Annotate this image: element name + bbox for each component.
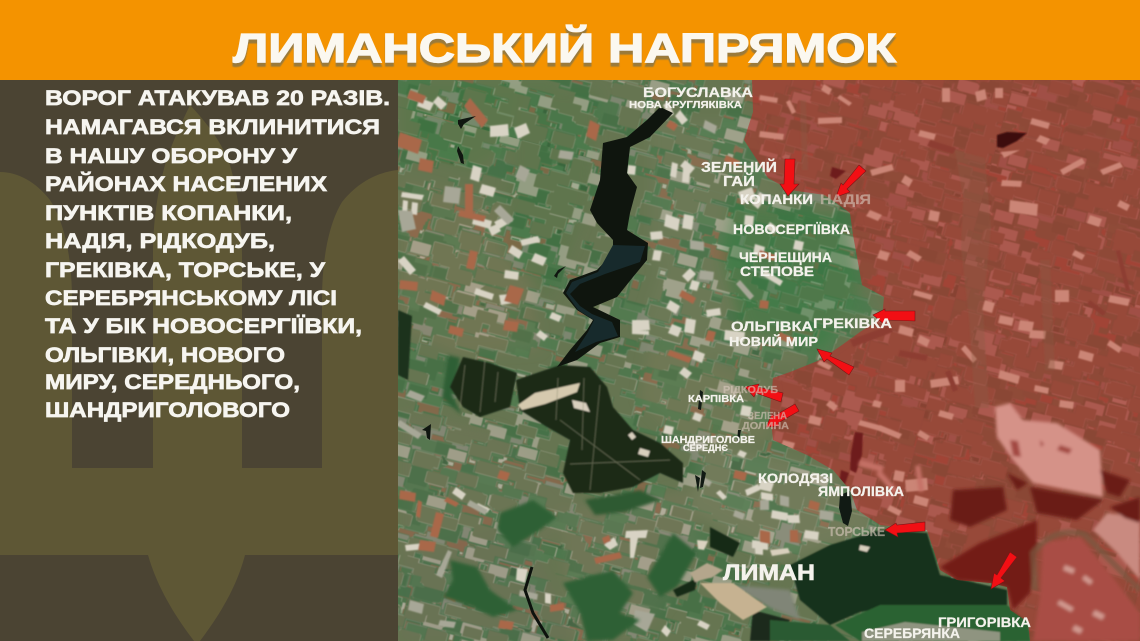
text: attack summary: СЕРЕБРЯНСЬКОМУ ЛІСІ <box>45 286 337 310</box>
text: attack summary: МИРУ, СЕРЕДНЬОГО, <box>45 370 300 394</box>
labels: settlements: РІДКОДУБ <box>723 384 778 396</box>
arrow: Kopanky <box>780 159 799 196</box>
map: satellite view of the Lyman direction <box>396 80 1140 641</box>
arrows: attack directions <box>745 159 1017 589</box>
arrow: Hrekivka <box>873 309 915 325</box>
labels: settlements: НОВИЙ МИР <box>729 334 818 349</box>
arrow: Novyi Myr <box>817 349 854 375</box>
labels: settlements: СЕРЕБРЯНКА <box>864 625 960 641</box>
occupied territory: red overlay <box>740 80 1140 641</box>
text: attack summary: РАЙОНАХ НАСЕЛЕНИХ <box>45 171 328 196</box>
labels: settlements: ШАНДРИГОЛОВЕ <box>661 434 755 446</box>
labels: settlements: КОЛОДЯЗІ <box>758 470 833 486</box>
labels: settlements: НАДІЯ <box>820 191 871 207</box>
labels: settlements: КОПАНКИ <box>740 191 813 207</box>
labels: settlements: ТОРСЬКЕ <box>828 524 885 539</box>
text: attack summary: ПУНКТІВ КОПАНКИ, <box>45 201 292 225</box>
red zone: field patches <box>759 84 1130 525</box>
title: ЛИМАНСЬКИЙ НАПРЯМОК <box>233 25 897 71</box>
text: attack summary: ВОРОГ АТАКУВАВ 20 РАЗІВ. <box>45 86 390 110</box>
terrain: forests <box>398 310 1030 641</box>
labels: settlements: БОГУСЛАВКА <box>643 84 753 100</box>
labels: settlements <box>629 84 1031 641</box>
terrain: green fields near the front <box>725 205 875 350</box>
labels: settlements: ГРИГОРІВКА <box>938 614 1031 630</box>
labels: settlements: ЛИМАН <box>723 560 815 585</box>
arrow: Zelena Dolyna <box>766 404 799 427</box>
labels: settlements: ЗЕЛЕНИЙ <box>701 158 777 176</box>
labels: settlements: НОВА КРУГЛЯКІВКА <box>629 99 742 111</box>
text: attack summary: НАМАГАВСЯ ВКЛИНИТИСЯ <box>45 115 380 139</box>
arrow: Nadiia <box>836 165 866 197</box>
labels: settlements: КАРПІВКА <box>688 393 744 405</box>
text: attack summary: В НАШУ ОБОРОНУ У <box>45 144 298 168</box>
text: attack summary: ТА У БІК НОВОСЕРГІЇВКИ, <box>45 314 362 338</box>
arrow: Ridkodub <box>745 384 783 402</box>
emblem: trident watermark <box>0 105 398 641</box>
text: attack summary: ОЛЬГІВКИ, НОВОГО <box>45 343 285 367</box>
text: attack summary <box>45 86 390 422</box>
arrow: Hryhorivka <box>991 552 1017 589</box>
labels: settlements: ГРЕКІВКА <box>813 315 892 331</box>
labels: settlements: ЗЕЛЕНА <box>748 410 787 422</box>
labels: settlements: ЧЕРНЕЩИНА <box>739 250 832 265</box>
red zone: pale ground and dark forests <box>858 403 1140 641</box>
arrow: Torske <box>885 522 925 537</box>
text: attack summary: НАДІЯ, РІДКОДУБ, <box>45 229 275 253</box>
water: reservoir and river <box>422 107 852 638</box>
terrain: farmland base <box>398 80 1140 641</box>
labels: settlements: ОЛЬГІВКА <box>731 318 813 334</box>
terrain: field patches <box>396 90 834 637</box>
labels: settlements: ГАЙ <box>723 172 755 190</box>
terrain: field mosaic <box>398 80 1140 641</box>
labels: settlements: СЕРЕДНЄ <box>683 443 729 453</box>
text: attack summary: ГРЕКІВКА, ТОРСЬКЕ, У <box>45 258 326 282</box>
labels: settlements: ЯМПОЛІВКА <box>818 483 904 499</box>
panel: left text panel with trident <box>0 80 398 641</box>
terrain: green woodland <box>442 355 800 641</box>
text: attack summary: ШАНДРИГОЛОВОГО <box>45 398 290 422</box>
labels: settlements: СТЕПОВЕ <box>740 264 814 279</box>
labels: settlements: НОВОСЕРГІЇВКА <box>733 222 850 237</box>
labels: settlements: ДОЛИНА <box>742 420 789 432</box>
header: orange title bar <box>0 0 1140 80</box>
